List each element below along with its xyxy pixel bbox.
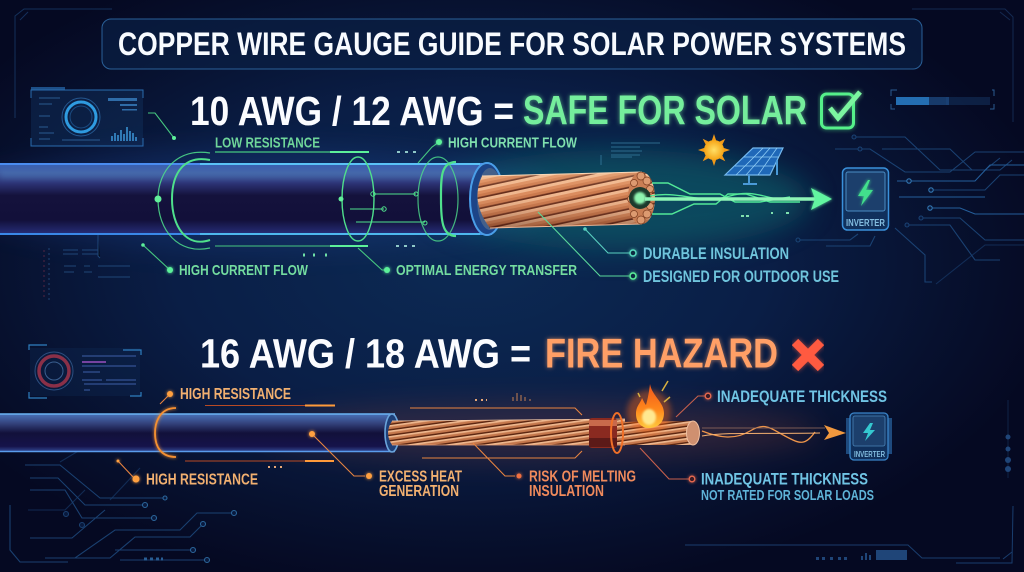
- label: risk of melting insulation: RISK OF MELTING: [529, 468, 636, 486]
- heading: safe gauges: 10 AWG / 12 AWG =: [190, 88, 514, 134]
- decorative tech frame: top left: [15, 9, 112, 118]
- heading: hazard gauges: FIRE HAZARD: [545, 330, 778, 376]
- label: low resistance: LOW RESISTANCE: [215, 134, 320, 152]
- heading: safe gauges: SAFE FOR SOLAR: [523, 87, 807, 133]
- green callout dots: [167, 139, 636, 279]
- label: designed for outdoor use: DESIGNED FOR OUTDOOR USE: [643, 268, 839, 286]
- label: optimal energy transfer: OPTIMAL ENERGY TRANSFER: [396, 262, 577, 279]
- icon: inverter bottom: [846, 413, 892, 460]
- label: risk of melting insulation: [529, 468, 636, 500]
- decorative tech frame: bottom right: [685, 400, 1013, 563]
- orange ring: [155, 408, 176, 457]
- label: high resistance top: HIGH RESISTANCE: [180, 386, 291, 403]
- panel: top-right progress readout: [891, 90, 994, 109]
- readout lines near conductor: [601, 143, 660, 165]
- heading: safe gauges: [190, 87, 807, 134]
- heading: hazard gauges: 16 AWG / 18 AWG =: [200, 330, 531, 376]
- panel: bottom-left HUD: [29, 345, 141, 398]
- icon: flame: [627, 381, 671, 434]
- icon: red cross: [795, 342, 821, 368]
- orange callout dots: [116, 391, 711, 482]
- status dots and level bars: bottom right: [816, 434, 1011, 560]
- decorative tech frame: top right: [912, 9, 1013, 122]
- panel: top-left HUD: [31, 87, 143, 146]
- title panel: [102, 19, 922, 69]
- green callout lines: [141, 113, 631, 276]
- icon: green check box: [822, 92, 860, 128]
- label: inadequate thickness bottom: INADEQUATE THICKNESS: [701, 470, 868, 488]
- label: high current flow top: HIGH CURRENT FLOW: [448, 134, 578, 152]
- label: high resistance bottom: HIGH RESISTANCE: [146, 472, 258, 488]
- icon: inverter top: [842, 168, 889, 230]
- arrow: weak orange current to inverter: [700, 425, 846, 442]
- label: excess heat generation: EXCESS HEAT: [379, 468, 462, 486]
- icon: solar panel: [725, 148, 783, 184]
- arrow: green current to inverter: [645, 183, 832, 216]
- heading: hazard gauges: [200, 330, 778, 376]
- panel: top-left small readouts: [44, 232, 130, 300]
- label: high current flow bottom: HIGH CURRENT FLOW: [179, 262, 309, 279]
- circuit traces: right: [796, 135, 1024, 284]
- orange callout lines: [118, 393, 706, 479]
- label: risk of melting insulation: INSULATION: [529, 483, 604, 500]
- green inspection rings: [154, 152, 458, 249]
- label: durable insulation: DURABLE INSULATION: [643, 245, 789, 263]
- circuit traces: bottom left: [10, 450, 236, 562]
- label: excess heat generation: [379, 468, 462, 500]
- wire jacket: [0, 163, 504, 235]
- inverter label: INVERTER: [846, 217, 885, 229]
- divider: [111, 315, 912, 317]
- wire: hazard 16/18 AWG cable: [0, 402, 820, 462]
- label: excess heat generation: GENERATION: [379, 483, 459, 500]
- melted sleeve: [589, 413, 625, 453]
- icon: sun: [698, 134, 730, 166]
- label: inadequate thickness bottom: [701, 470, 874, 504]
- label: inadequate thickness top: INADEQUATE THICKNESS: [717, 388, 887, 406]
- thin copper conductor: [388, 419, 700, 445]
- thin wire jacket: [0, 414, 399, 452]
- glow: teal behind conductor: [430, 150, 810, 250]
- copper conductor: [478, 172, 655, 228]
- label: inadequate thickness bottom: NOT RATED FOR SOLAR LOADS: [701, 488, 874, 504]
- inverter label bottom: INVERTER: [854, 450, 885, 459]
- wire: safe 10/12 AWG cable: [0, 149, 655, 249]
